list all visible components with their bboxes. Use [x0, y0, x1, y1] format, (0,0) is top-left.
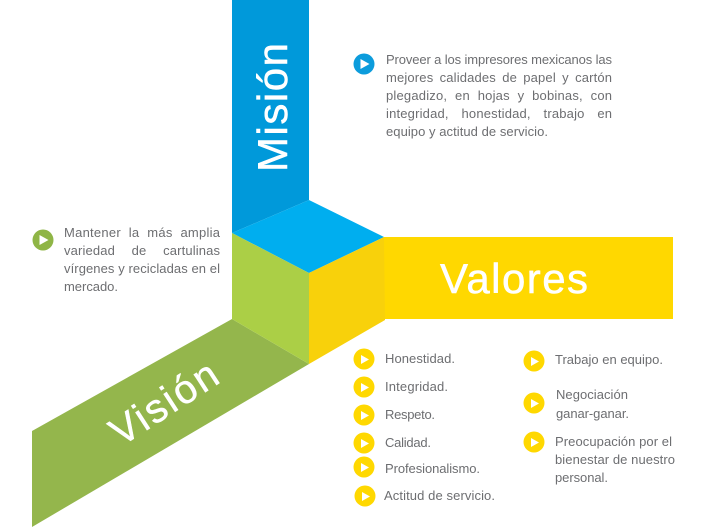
list: valores column 1: Calidad. [385, 435, 431, 450]
icon: yellow play bullet [354, 404, 374, 426]
list: valores column 2: bienestar de nuestro [555, 452, 675, 467]
icon: yellow play bullet [524, 432, 544, 452]
text block: misión: plegadizo, en hojas y bobinas, con [386, 88, 612, 103]
heading: Visión: Visión [102, 352, 227, 455]
list: valores column 2: ganar-ganar. [556, 406, 629, 421]
text block: misión: equipo y actitud de servicio. [386, 124, 548, 139]
panel: Valores band [384, 237, 673, 319]
list: valores column 2: Negociación [556, 387, 628, 402]
icon: yellow play bullet [524, 350, 544, 372]
heading: Misión: Misión [249, 43, 296, 172]
text block: visión: mercado. [64, 279, 118, 294]
text block: misión: integridad, honestidad, trabajo en [386, 106, 612, 121]
icon: yellow play bullet [354, 456, 374, 478]
icon: yellow play bullet [354, 376, 374, 398]
panel: Visión band [32, 319, 309, 527]
heading: Valores: Valores [440, 255, 588, 302]
icon: yellow play bullet [354, 348, 374, 370]
list: valores column 1: Integridad. [385, 379, 448, 394]
list: valores column 1 [354, 348, 495, 506]
icon: blue play bullet [354, 54, 374, 74]
list: valores column 1: Actitud de servicio. [384, 488, 495, 503]
list: valores column 2: personal. [555, 470, 608, 485]
icon: yellow play bullet [354, 432, 374, 454]
text block: visión [32, 225, 221, 294]
text block: misión: mejores calidades de papel y cartón [386, 70, 612, 85]
icon: green play bullet [32, 230, 54, 250]
list: valores column 1: Respeto. [385, 407, 435, 422]
text block: visión: vírgenes y recicladas en el [64, 261, 220, 276]
text block: visión: variedad de cartulinas [64, 243, 220, 258]
list: valores column 1: Honestidad. [385, 351, 455, 366]
list: valores column 1: Profesionalismo. [385, 461, 480, 476]
icon: yellow play bullet [524, 392, 544, 414]
panel: Misión band [232, 0, 309, 233]
list: valores column 2: Preocupación por el [555, 434, 672, 449]
list: valores column 2: Trabajo en equipo. [555, 352, 663, 367]
text block: visión: Mantener la más amplia [64, 225, 221, 240]
text block: misión [354, 52, 612, 139]
text block: misión: Proveer a los impresores mexicanos las [386, 52, 612, 67]
icon: yellow play bullet [354, 486, 376, 506]
cube: center shape [232, 200, 385, 364]
list: valores column 2 [524, 350, 675, 485]
